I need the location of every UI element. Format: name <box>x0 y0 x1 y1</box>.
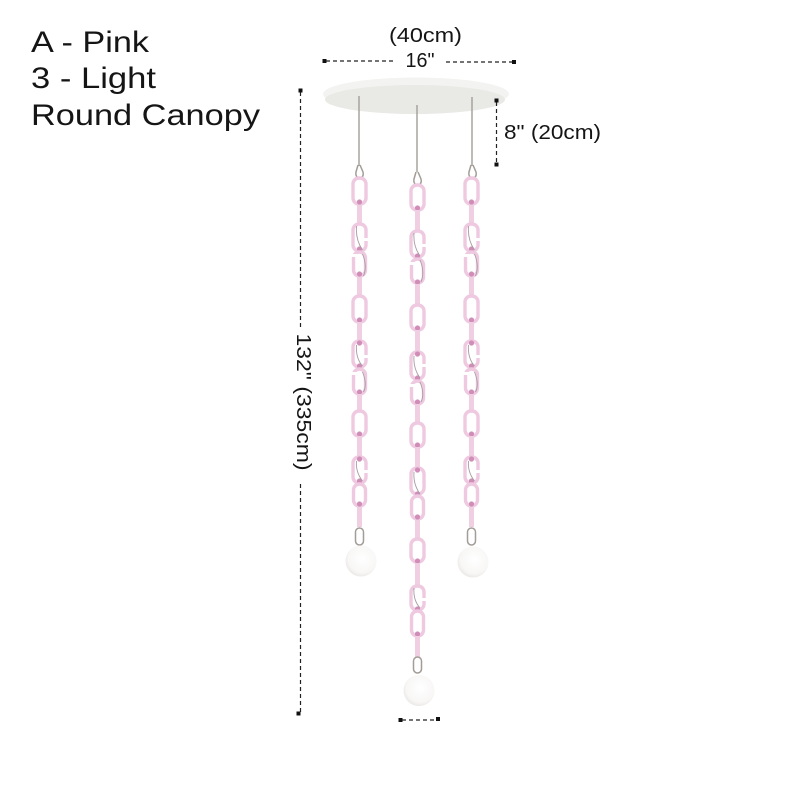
canopy <box>323 78 509 114</box>
dimension: rod height <box>494 98 601 166</box>
dimension: rod height: 8" (20cm) <box>504 122 601 144</box>
dimension: globe diameter <box>398 717 440 722</box>
middle globe <box>404 675 434 706</box>
left globe <box>346 546 376 576</box>
dimension: canopy width: 16" <box>406 50 434 72</box>
dimension: canopy width <box>322 25 516 72</box>
pendant: right chain <box>458 165 488 578</box>
right globe <box>458 546 488 578</box>
title: product variant <box>31 26 260 132</box>
dimension: total drop: 132" (335cm) <box>292 334 314 470</box>
hanging rods <box>359 96 472 172</box>
dimension: canopy width: (40cm) <box>389 25 462 47</box>
dimension: total drop <box>292 88 314 716</box>
title: product variant: A - Pink <box>31 26 150 59</box>
pendant: middle chain <box>404 172 434 706</box>
title: product variant: 3 - Light <box>31 62 157 95</box>
pendant: left chain <box>346 165 376 576</box>
title: product variant: Round Canopy <box>31 99 260 132</box>
